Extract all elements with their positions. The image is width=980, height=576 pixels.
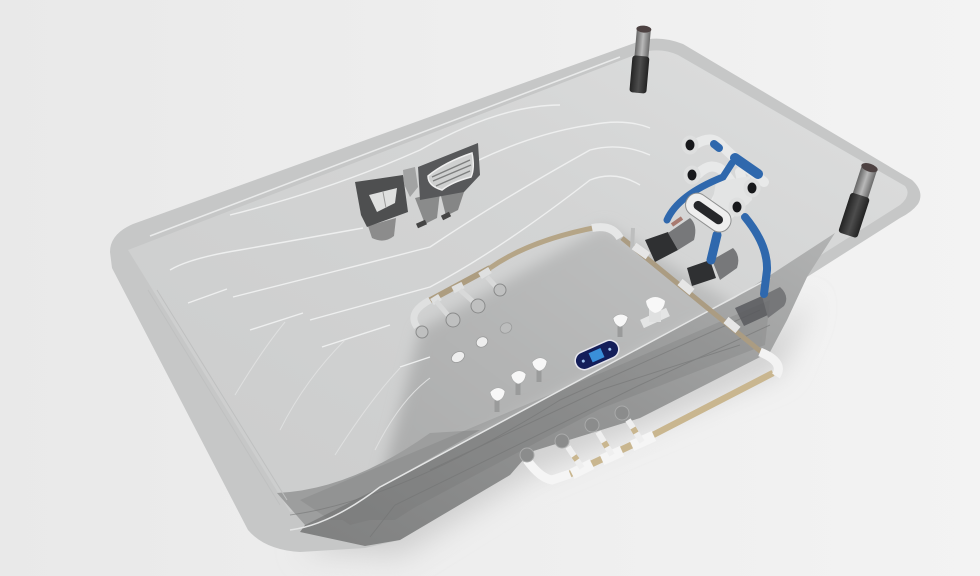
outer rim: [110, 39, 920, 552]
pump 3: [735, 287, 786, 326]
valve: [642, 297, 668, 324]
jet manifold: [667, 138, 767, 294]
jet rings: [684, 138, 758, 214]
rim highlight: [150, 57, 620, 236]
grille panel: [403, 143, 480, 226]
front manifold: [520, 406, 654, 480]
knob stems: [497, 325, 620, 412]
post: right rim: [838, 161, 880, 238]
buttons and fittings on deck: [449, 297, 668, 412]
beige plumbing: [414, 227, 778, 480]
white manifold pipes: [696, 139, 764, 205]
small ovals: [449, 321, 514, 365]
floor edge highlight: [290, 278, 770, 530]
hull layer folds: [300, 300, 770, 525]
air knobs: [490, 314, 628, 401]
inner rim lines: [148, 290, 287, 505]
valves on rim pipe: [632, 228, 738, 330]
blue hoses: [667, 144, 767, 294]
bathtub shell: [110, 39, 920, 552]
dark lower hull layers: [300, 233, 835, 546]
pump 1: [645, 218, 695, 262]
wall jets panels: [355, 143, 480, 241]
basin floor: [380, 225, 735, 487]
faint wave lines on sloped end: [235, 322, 430, 455]
dark band above front edge: [277, 430, 480, 525]
pump 2: [687, 248, 738, 286]
control display: [572, 337, 622, 373]
rear manifold: [414, 268, 506, 338]
oval jet: [681, 189, 735, 236]
manifold body: [712, 176, 752, 222]
tub shadow on floor: [300, 300, 810, 556]
contour lines in walls: [170, 105, 650, 367]
pumps: [645, 218, 786, 326]
post: top rim: [629, 25, 652, 94]
square skimmer panel: [355, 175, 408, 241]
inner basin walls: [128, 50, 908, 512]
fold lines: [290, 310, 770, 537]
